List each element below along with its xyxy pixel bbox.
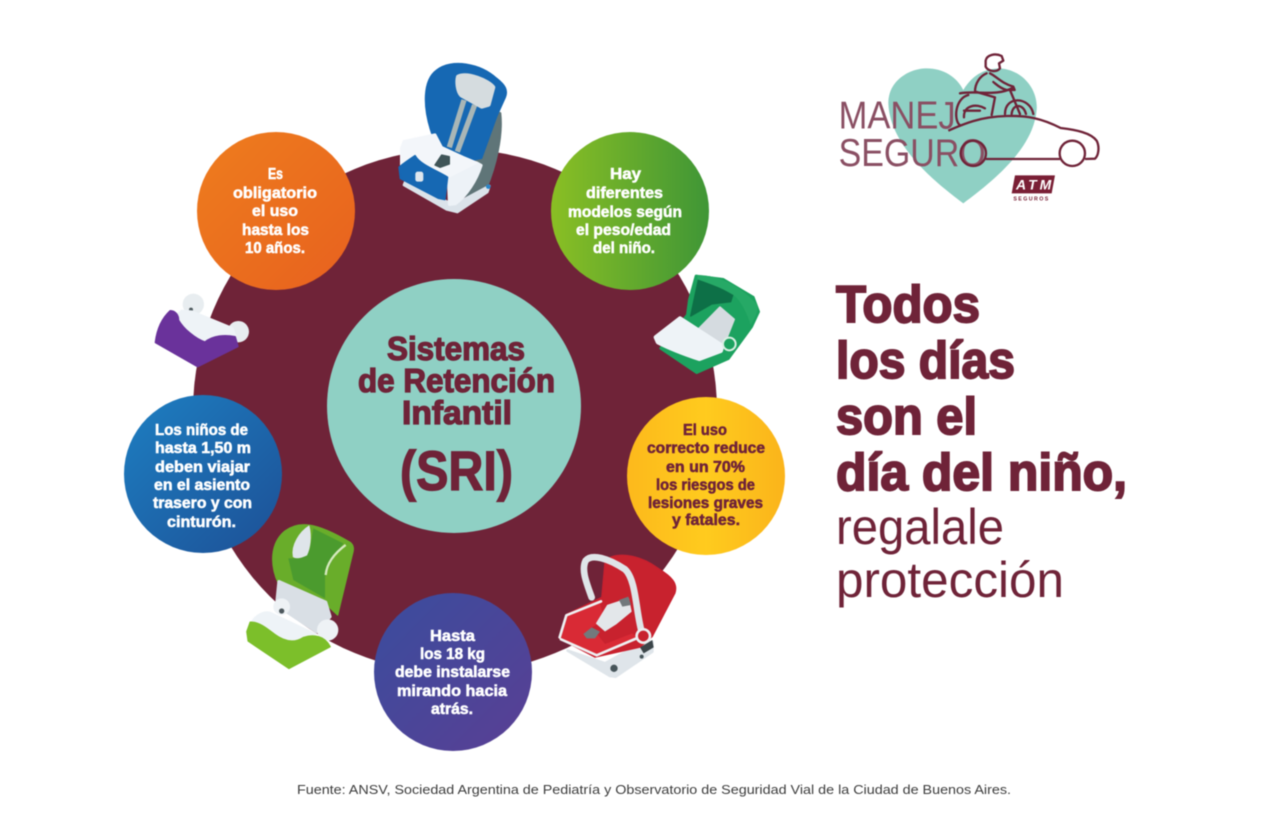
purple circle: hasta 18 kg mirando hacia atrás [374, 593, 532, 751]
orange circle: obligatorio hasta 10 años: 10 años. [245, 240, 305, 257]
logo wordmark: MANEJ [839, 94, 956, 137]
yellow circle: uso correcto reduce riesgos: los riesgos de [656, 477, 755, 494]
blue circle: niños hasta 1,50 m: trasero y con [153, 495, 252, 512]
source footnote: Fuente: ANSV, Sociedad Argentina de Pediatría y Observatorio de Seguridad Vial de la Ciudad de Buenos Aires. [297, 783, 1011, 797]
headline: Todos los días son el día del niño, regalale protección [836, 276, 1127, 608]
icon: green booster seat with back [247, 525, 353, 668]
logo wordmark [839, 94, 986, 175]
orange circle: obligatorio hasta 10 años: obligatorio [233, 185, 317, 202]
logo motorcycle rider [956, 54, 1033, 125]
blue circle: niños hasta 1,50 m: cinturón. [167, 514, 236, 531]
icon: red infant carrier [559, 555, 676, 677]
yellow circle: uso correcto reduce riesgos: lesiones graves [648, 495, 763, 512]
central circle: Sistemas de Retención Infantil (SRI): Infantil [402, 394, 512, 431]
orange circle: obligatorio hasta 10 años: el uso [252, 203, 298, 220]
icon: blue child seat [399, 64, 506, 212]
blue circle: niños hasta 1,50 m [124, 395, 282, 553]
central circle: Sistemas de Retención Infantil (SRI): Sistemas [387, 330, 525, 367]
central circle: Sistemas de Retención Infantil (SRI) [327, 279, 581, 533]
yellow circle: uso correcto reduce riesgos: en un 70% [666, 459, 745, 476]
purple circle: hasta 18 kg mirando hacia atrás: debe instalarse [395, 664, 510, 681]
logo: Manejo Seguro [839, 54, 1098, 203]
orange circle: obligatorio hasta 10 años: Es [268, 166, 283, 183]
yellow circle: uso correcto reduce riesgos: y fatales. [672, 512, 740, 529]
green circle: diferentes modelos: Hay [610, 166, 641, 183]
purple circle: hasta 18 kg mirando hacia atrás: atrás. [431, 701, 473, 718]
green circle: diferentes modelos: el peso/edad [576, 222, 671, 239]
central circle: Sistemas de Retención Infantil (SRI): de Retención [358, 362, 555, 399]
icon: green carrycot [656, 275, 759, 373]
maroon background circle [193, 149, 717, 673]
logo car outline [948, 116, 1098, 166]
headline: Todos los días son el día del niño, regalale protección: son el [836, 388, 977, 446]
yellow circle: uso correcto reduce riesgos: El uso [683, 422, 727, 439]
logo wordmark: SEGURO [839, 132, 986, 175]
icon: purple booster cushion [156, 294, 249, 366]
headline: Todos los días son el día del niño, regalale protección: regalale [836, 499, 1004, 555]
blue circle: niños hasta 1,50 m: en el asiento [154, 477, 250, 494]
headline: Todos los días son el día del niño, regalale protección: día del niño, [836, 444, 1127, 502]
headline: Todos los días son el día del niño, regalale protección: Todos [836, 276, 980, 334]
headline: Todos los días son el día del niño, regalale protección: los días [836, 332, 1015, 390]
purple circle: hasta 18 kg mirando hacia atrás: Hasta [430, 628, 475, 645]
logo ATM Seguros: SEGUROS [1013, 196, 1049, 202]
blue circle: niños hasta 1,50 m: hasta 1,50 m [155, 440, 251, 457]
green circle: diferentes modelos [551, 132, 709, 290]
headline: Todos los días son el día del niño, regalale protección: protección [836, 552, 1064, 608]
green circle: diferentes modelos: modelos según [568, 204, 682, 221]
logo ATM Seguros: ATM [1015, 177, 1052, 193]
orange circle: obligatorio hasta 10 años [197, 132, 355, 290]
logo heart [888, 68, 1037, 203]
central circle: Sistemas de Retención Infantil (SRI): (SRI) [400, 439, 513, 502]
green circle: diferentes modelos: del niño. [593, 240, 655, 257]
purple circle: hasta 18 kg mirando hacia atrás: los 18 kg [420, 646, 485, 663]
blue circle: niños hasta 1,50 m: deben viajar [155, 459, 250, 476]
purple circle: hasta 18 kg mirando hacia atrás: mirando hacia [397, 683, 507, 700]
logo ATM Seguros [1012, 175, 1055, 202]
yellow circle: uso correcto reduce riesgos: correcto reduce [647, 440, 765, 457]
orange circle: obligatorio hasta 10 años: hasta los [242, 222, 309, 239]
green circle: diferentes modelos: diferentes [586, 185, 663, 202]
yellow circle: uso correcto reduce riesgos [627, 397, 785, 555]
blue circle: niños hasta 1,50 m: Los niños de [155, 422, 248, 439]
